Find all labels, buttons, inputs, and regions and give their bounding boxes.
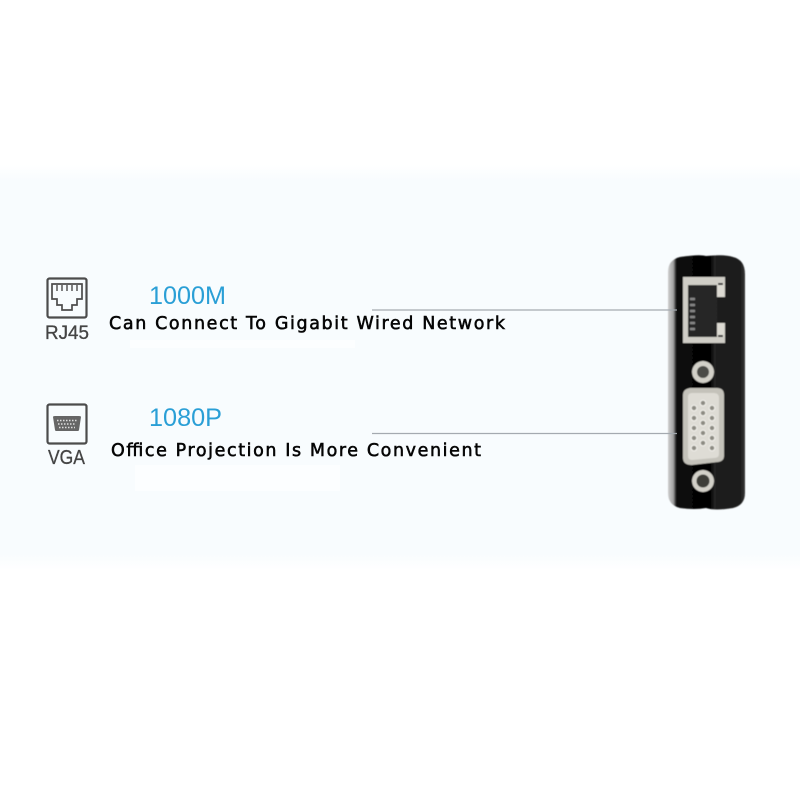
text: gigabit network: Can Connect To Gigabit Wired Network: [109, 314, 506, 334]
port: VGA: [683, 388, 724, 465]
label: VGA: VGA: [48, 447, 86, 469]
text: office projection: Office Projection Is More Convenient: [111, 441, 481, 461]
leader line: RJ45: [372, 309, 677, 311]
port: RJ45: [683, 277, 725, 343]
heading: 1080P: 1080P: [149, 404, 222, 432]
screw: bottom: [692, 470, 714, 492]
leader line: VGA: [372, 432, 677, 434]
icon: VGA: [48, 404, 86, 469]
icon: RJ45: [45, 278, 89, 344]
label: RJ45: RJ45: [45, 323, 89, 344]
screw: top: [692, 361, 714, 383]
device: adapter side: [668, 255, 745, 510]
heading: 1000M: 1000M: [149, 282, 226, 310]
